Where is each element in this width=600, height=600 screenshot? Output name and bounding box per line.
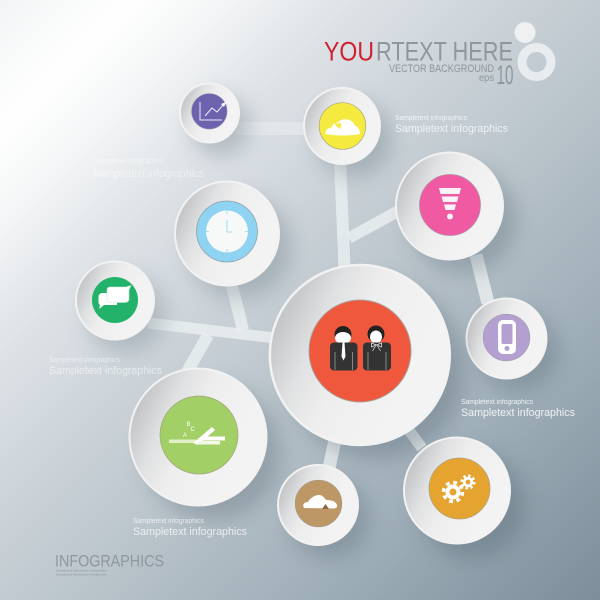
title: [324, 36, 514, 90]
caption top right: Sampletext infographics: [395, 123, 508, 135]
caption left: Sampletext infographics: [49, 365, 162, 377]
title: RTEXT HERE: [376, 36, 513, 66]
caption top left: [93, 158, 204, 180]
icon: open book: C: [190, 427, 196, 433]
caption top right: Sampletext infographics: [395, 115, 467, 122]
caption right: Sampletext infographics: [461, 399, 533, 406]
caption right: Sampletext infographics: [461, 407, 575, 419]
title: VECTOR BACKGROUND: [389, 63, 494, 75]
icon: line chart: [200, 102, 226, 120]
connectors: [148, 128, 488, 468]
logo circles: [514, 22, 551, 76]
footer label: Sampletext Sampletext Sampletext: [56, 568, 107, 572]
footer label: INFOGRAPHICS: [55, 552, 164, 570]
title: 10: [496, 60, 514, 90]
node: green book: [130, 368, 281, 520]
title: YOU: [324, 36, 374, 66]
icon: woman: [363, 326, 391, 370]
caption left: [49, 357, 162, 377]
footer label: [55, 552, 164, 576]
node: orange gears: [404, 438, 525, 558]
node: brown cloud: [278, 465, 369, 558]
icon: clock: [206, 210, 248, 252]
icon: phone: [498, 320, 516, 354]
node: phone: [466, 298, 558, 391]
node: yellow cloud: [304, 88, 392, 177]
icon: upload cloud: [303, 495, 337, 509]
caption top right: [395, 115, 508, 135]
caption top left: Sampletext infographics: [93, 168, 204, 180]
title: eps: [479, 72, 494, 84]
icon: cloud: [325, 119, 360, 136]
caption bottom: Sampletext infographics: [133, 526, 247, 538]
icon: speech bubbles: [98, 286, 131, 309]
icon: funnel: [439, 188, 461, 220]
footer label: Sampletext Sampletext Sampletext: [56, 572, 106, 576]
icon: open book: B: [186, 422, 191, 428]
caption bottom: Sampletext infographics: [133, 518, 204, 525]
icon: open book: [169, 422, 225, 445]
node: pink filter: [396, 152, 516, 273]
node: chart: [180, 84, 250, 155]
caption top left: Sampletext infographics: [95, 158, 163, 165]
node: clock: [175, 182, 292, 299]
node: chat: [76, 262, 165, 353]
caption bottom: [133, 518, 247, 538]
icon: gears: [444, 476, 474, 502]
node: main people: [270, 265, 464, 459]
caption left: Sampletext infographics: [49, 357, 120, 364]
caption right: [461, 399, 575, 419]
icon: man: [330, 326, 358, 370]
icon: open book: A: [183, 433, 187, 439]
